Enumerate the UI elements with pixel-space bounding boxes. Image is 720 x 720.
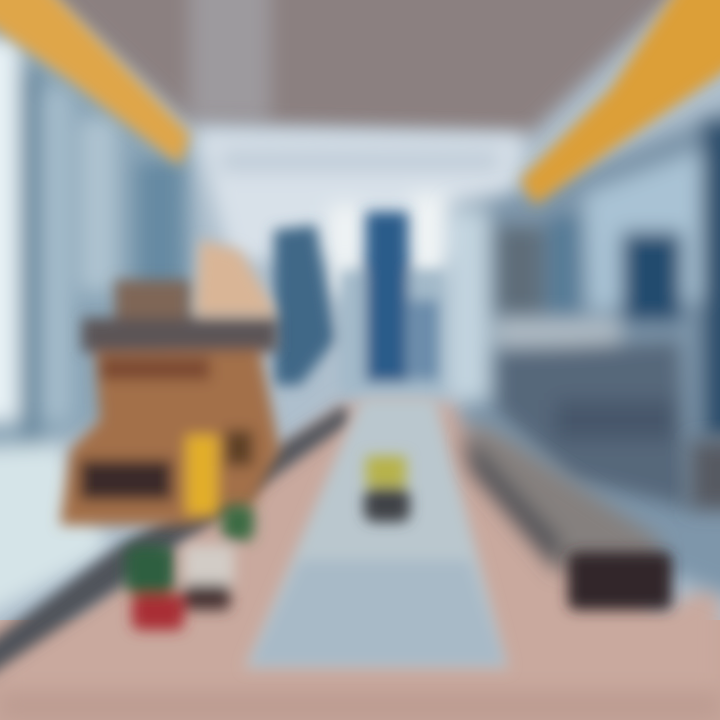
- right ceiling beam: [520, 0, 720, 205]
- central city view towers: [274, 212, 450, 395]
- left ceiling beam: [0, 0, 190, 165]
- floor: [0, 400, 720, 720]
- plants and pots: [125, 505, 254, 630]
- left window wall: [0, 0, 200, 630]
- center bright header band: [195, 130, 525, 295]
- left floor edge strip: [0, 405, 350, 695]
- ceiling: [10, 0, 710, 135]
- right dark bench: [568, 552, 672, 610]
- floor base: [0, 620, 720, 720]
- wooden cabinet structure: [60, 240, 280, 525]
- right bench row: [462, 420, 720, 585]
- carpet runner: [245, 398, 508, 668]
- right wall: [450, 90, 720, 610]
- small yellow object: [364, 456, 410, 522]
